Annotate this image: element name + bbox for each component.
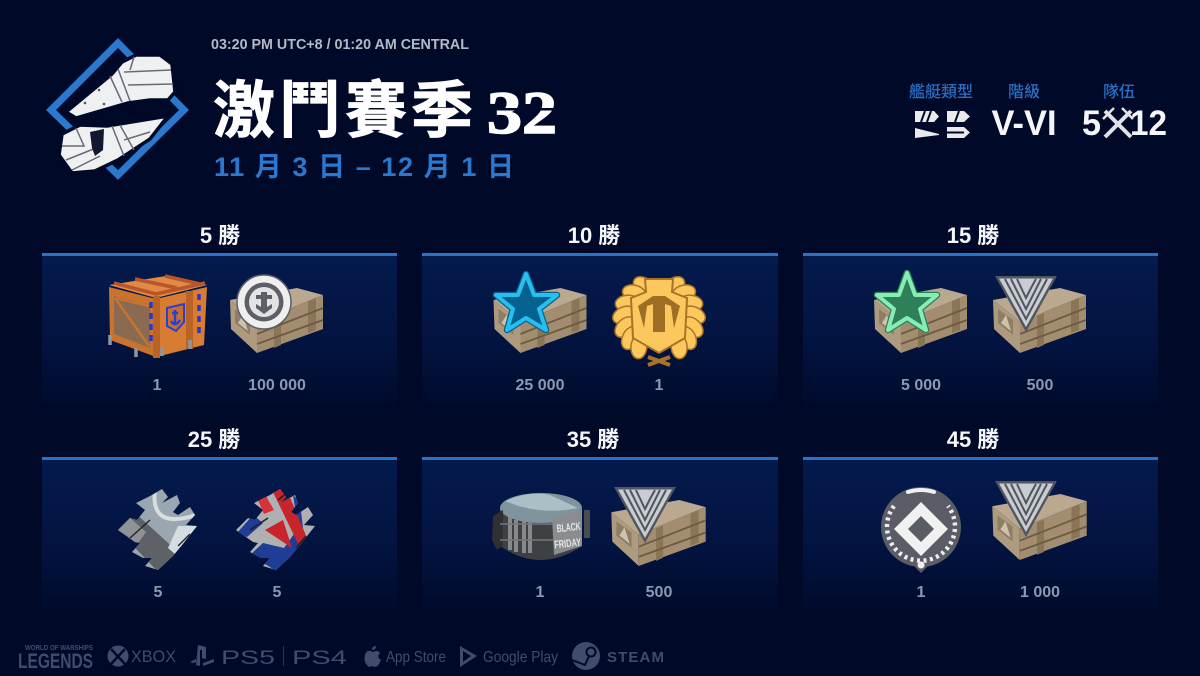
logo: World of Warships Legends: LEGENDS	[18, 650, 93, 673]
logo: App Store: App Store	[386, 649, 446, 666]
icon: steel crate with V	[993, 276, 1086, 353]
tier	[992, 83, 1056, 143]
logo: Steam: STEAM	[607, 649, 664, 666]
icon: silver diamond medal	[881, 487, 961, 573]
icon: upper gauntlet	[66, 55, 175, 118]
logo: Steam	[572, 642, 664, 670]
icon: Black Friday drum: FRIDAY	[554, 537, 582, 551]
value: 5	[273, 584, 282, 601]
title: 激鬥賽季	[213, 60, 473, 150]
icon: green star crate	[874, 273, 967, 353]
heading: 45 勝	[947, 427, 999, 452]
panel: 25 wins	[42, 427, 397, 610]
logo: Xbox: XBOX	[131, 647, 176, 666]
time line: 03:20 PM UTC+8 / 01:20 AM CENTRAL	[211, 37, 469, 53]
tier: 階級	[1008, 83, 1040, 101]
value: 5 000	[901, 377, 941, 394]
logo: App Store	[364, 646, 446, 667]
team size: 5	[1082, 104, 1101, 143]
icon: steel crate with V	[992, 481, 1087, 560]
panel: 45 wins	[803, 427, 1158, 610]
value: 100 000	[248, 377, 306, 394]
team size	[1082, 83, 1167, 143]
footer platform logos	[18, 642, 664, 673]
logo: Xbox	[108, 646, 176, 666]
heading: 35 勝	[567, 427, 619, 452]
icon: blue diamond frame	[51, 43, 184, 175]
icon: Black Friday drum: BLACK	[556, 521, 581, 535]
icon: crossed swords	[1103, 108, 1133, 137]
panel: 10 wins	[422, 223, 778, 406]
value: 500	[1027, 377, 1053, 394]
value: 500	[646, 584, 672, 601]
logo: PS5 and PS4: PS5	[221, 648, 275, 669]
value: 1 000	[1020, 584, 1060, 601]
heading: 10 勝	[568, 223, 620, 248]
panel: 15 wins	[803, 223, 1158, 406]
value: 1	[153, 377, 162, 394]
value: 5	[154, 584, 163, 601]
logo: Google Play: Google Play	[483, 649, 558, 666]
logo: PS5 and PS4: PS4	[292, 648, 348, 669]
heading: 5 勝	[200, 223, 240, 248]
icon: crossed gauntlets in blue diamond	[51, 43, 184, 175]
icon: union flag gear patch	[236, 489, 315, 570]
logo: PS5 and PS4	[190, 645, 348, 669]
title number: 32	[487, 80, 557, 146]
icon: orange anchor crate	[109, 276, 207, 358]
icon: silver gear patch	[118, 489, 197, 570]
icon: steel crate with V	[611, 487, 706, 566]
ship type: 艦艇類型	[909, 83, 973, 101]
icon: ship classes	[915, 111, 970, 138]
heading: 25 勝	[188, 427, 240, 452]
value: 1	[536, 584, 545, 601]
logo: Google Play	[460, 646, 558, 667]
value: 25 000	[516, 377, 565, 394]
icon: Black Friday drum	[492, 493, 587, 560]
tier: V-VI	[992, 104, 1056, 143]
icon: lower gauntlet	[59, 116, 168, 173]
value: 1	[917, 584, 926, 601]
icon: blue star crate	[494, 274, 586, 353]
date range: 11 月 3 日 – 12 月 1 日	[214, 152, 514, 182]
heading: 15 勝	[947, 223, 999, 248]
value: 1	[655, 377, 664, 394]
logo: World of Warships Legends: WORLD OF WARSHIPS	[25, 643, 93, 652]
panel: 5 wins	[42, 223, 397, 406]
panel: 35 wins	[422, 427, 778, 610]
ship type	[909, 83, 973, 138]
icon: gold laurel emblem	[610, 273, 708, 365]
icon: credits crate	[230, 275, 323, 353]
logo: World of Warships Legends	[18, 643, 93, 673]
team size: 12	[1130, 104, 1167, 143]
team size: 隊伍	[1103, 83, 1135, 101]
